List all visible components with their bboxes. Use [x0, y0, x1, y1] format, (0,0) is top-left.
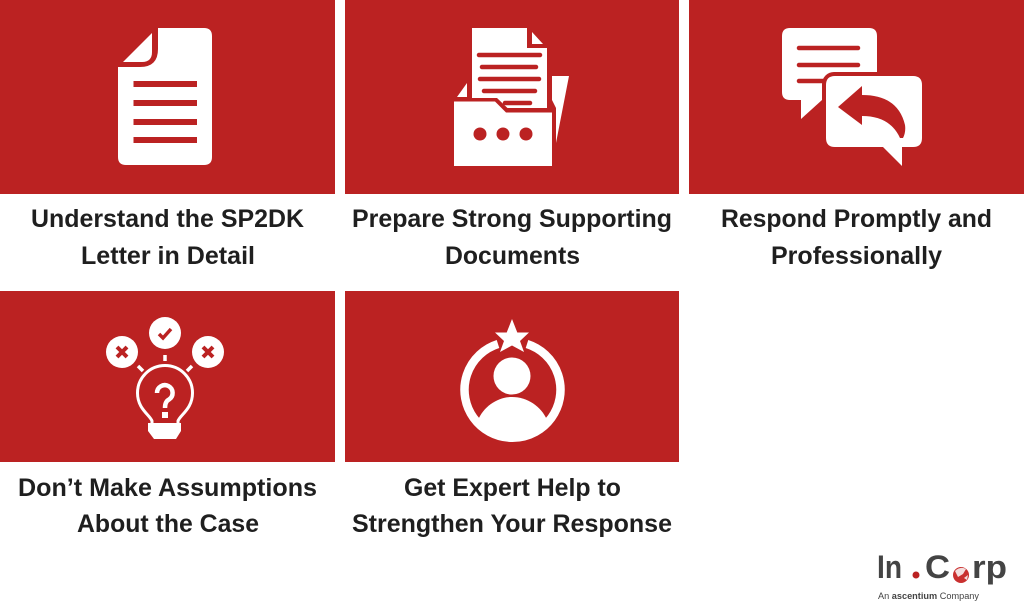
panel: respond promptly	[689, 0, 1024, 194]
icon: light bulb with question	[106, 317, 224, 439]
icon: document	[118, 28, 212, 165]
heading: no assumptions	[18, 474, 317, 538]
icon: reply speech bubbles	[782, 28, 926, 166]
logo: InCorp: C	[925, 549, 950, 585]
icon: folder with documents	[450, 28, 569, 166]
heading: understand the letter: Understand the SP2DK	[31, 205, 304, 233]
logo: InCorp: rp	[972, 549, 1007, 585]
heading: expert help: Strengthen Your Response	[352, 510, 672, 538]
heading: respond promptly	[721, 205, 992, 270]
heading: expert help	[352, 474, 672, 538]
heading: supporting documents	[352, 205, 672, 270]
panel: understand the letter	[0, 0, 335, 194]
panel: supporting documents	[345, 0, 679, 194]
logo: InCorp: In	[877, 549, 902, 585]
heading: understand the letter	[31, 205, 304, 270]
heading: understand the letter: Letter in Detail	[81, 242, 255, 270]
logo: InCorp: An ascentium Company	[878, 591, 979, 601]
icon: person with star	[465, 319, 561, 438]
heading: no assumptions: About the Case	[77, 510, 259, 538]
heading: respond promptly: Respond Promptly and	[721, 205, 992, 233]
logo: InCorp	[877, 549, 1007, 601]
heading: supporting documents: Prepare Strong Supporting	[352, 205, 672, 233]
panel: expert help	[345, 291, 679, 462]
heading: no assumptions: Don’t Make Assumptions	[18, 474, 317, 502]
heading: respond promptly: Professionally	[771, 242, 942, 270]
panel: no assumptions	[0, 291, 335, 462]
heading: supporting documents: Documents	[445, 242, 580, 270]
heading: expert help: Get Expert Help to	[404, 474, 621, 502]
